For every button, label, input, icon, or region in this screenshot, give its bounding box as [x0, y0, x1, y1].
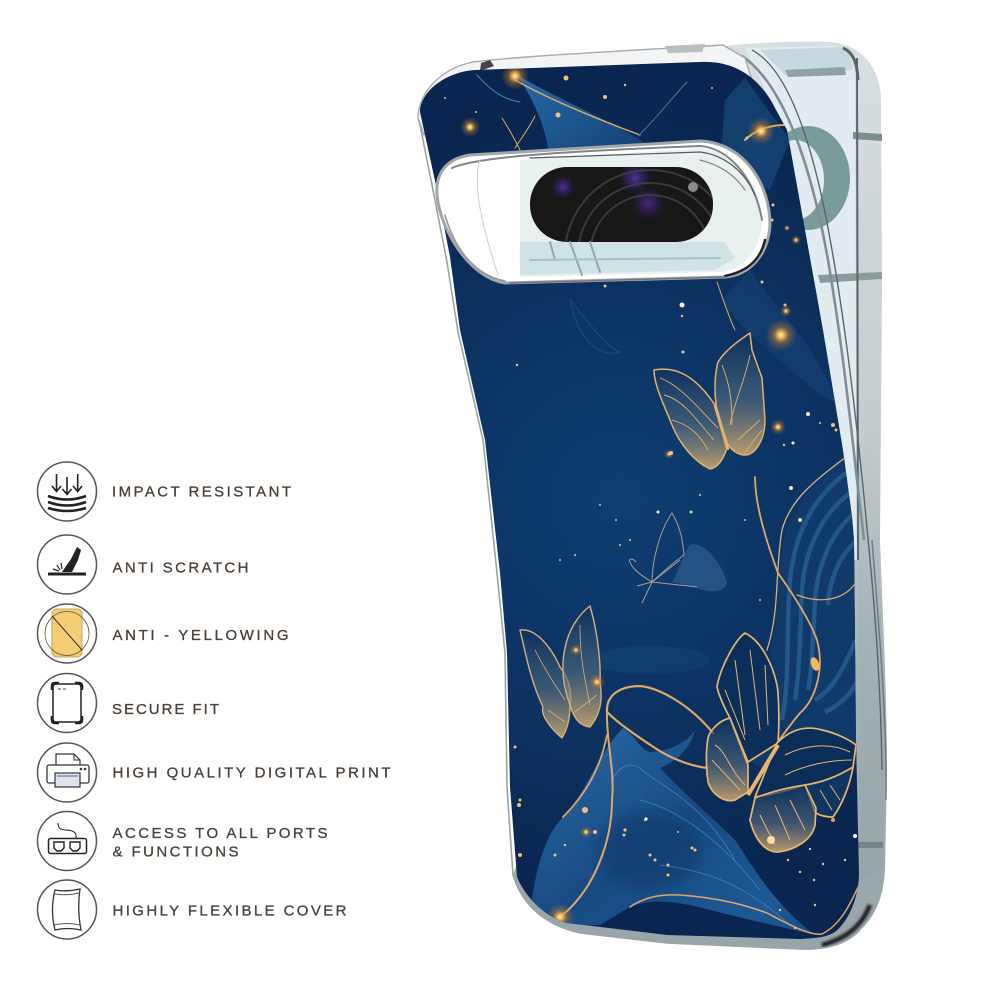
gold glows: [460, 62, 801, 931]
icon: impact arrows: [38, 462, 96, 521]
feature: impact resistant: [38, 462, 291, 521]
feature: impact resistant: IMPACT RESISTANT: [112, 484, 291, 500]
blue leaf swoosh: [530, 728, 815, 935]
two-line label: & FUNCTIONS: [112, 844, 238, 861]
soft haze: [672, 657, 710, 672]
feature: anti yellowing: [38, 604, 288, 663]
feature: access to all ports and functions: [38, 812, 328, 870]
bevel rim lines: [445, 146, 765, 283]
phone back glass: [745, 46, 857, 560]
camera cut-out: [435, 140, 772, 284]
icon: phone with corner bumpers: [38, 674, 96, 732]
icon: printer: [38, 743, 96, 802]
navy background: [410, 50, 870, 950]
lens module: [530, 167, 713, 242]
cut-out opening: [437, 141, 770, 283]
phone in clear case: [513, 42, 887, 949]
main gold lines: [477, 75, 858, 934]
case top rim: [418, 44, 752, 135]
butterfly: faint centre: [630, 513, 727, 603]
feature: secure fit: SECURE FIT: [112, 701, 219, 718]
scattered gold specks: [444, 76, 857, 929]
feature: high quality digital print: HIGH QUALITY DIGITAL PRINT: [112, 764, 390, 781]
feature: anti scratch: ANTI SCRATCH: [112, 560, 248, 576]
phone glass in cut-out: [520, 148, 762, 277]
feature: highly flexible cover: HIGHLY FLEXIBLE COVER: [112, 903, 347, 920]
teal camera circle: [766, 126, 850, 230]
teal lower strip: [520, 242, 735, 275]
icon: dual port connector: [38, 812, 96, 870]
leaf dark centre shade: [600, 812, 700, 888]
side frame lines: [742, 48, 886, 800]
phone and case silhouette: [513, 42, 887, 949]
upper glass tint: [760, 47, 853, 75]
icon: bent cover: [38, 880, 96, 939]
icon: blade on surface: [38, 535, 96, 594]
two-line label: [112, 825, 328, 861]
dark lower corner shading: [822, 905, 870, 945]
feature: high quality digital print: [38, 743, 390, 802]
feature: anti scratch: [38, 535, 248, 594]
icon: yellowed phone crossed out: [38, 604, 96, 663]
feature: anti yellowing: ANTI - YELLOWING: [112, 627, 288, 644]
case left and bottom rim: [419, 120, 860, 949]
leaf highlight strokes: [612, 765, 790, 925]
butterfly: large lower right: [706, 633, 856, 852]
butterfly: upper right: [654, 333, 765, 469]
feature: highly flexible cover: [38, 880, 347, 939]
butterfly: lower left: [520, 606, 601, 738]
two-line label: ACCESS TO ALL PORTS: [112, 825, 328, 842]
swirl panel on right: [752, 458, 856, 769]
camera bar shadow bands: [785, 67, 883, 848]
printed case artwork: [410, 50, 870, 950]
bright side strip: [858, 60, 884, 880]
top blue veils: [517, 75, 838, 405]
feature: secure fit: [38, 674, 219, 732]
